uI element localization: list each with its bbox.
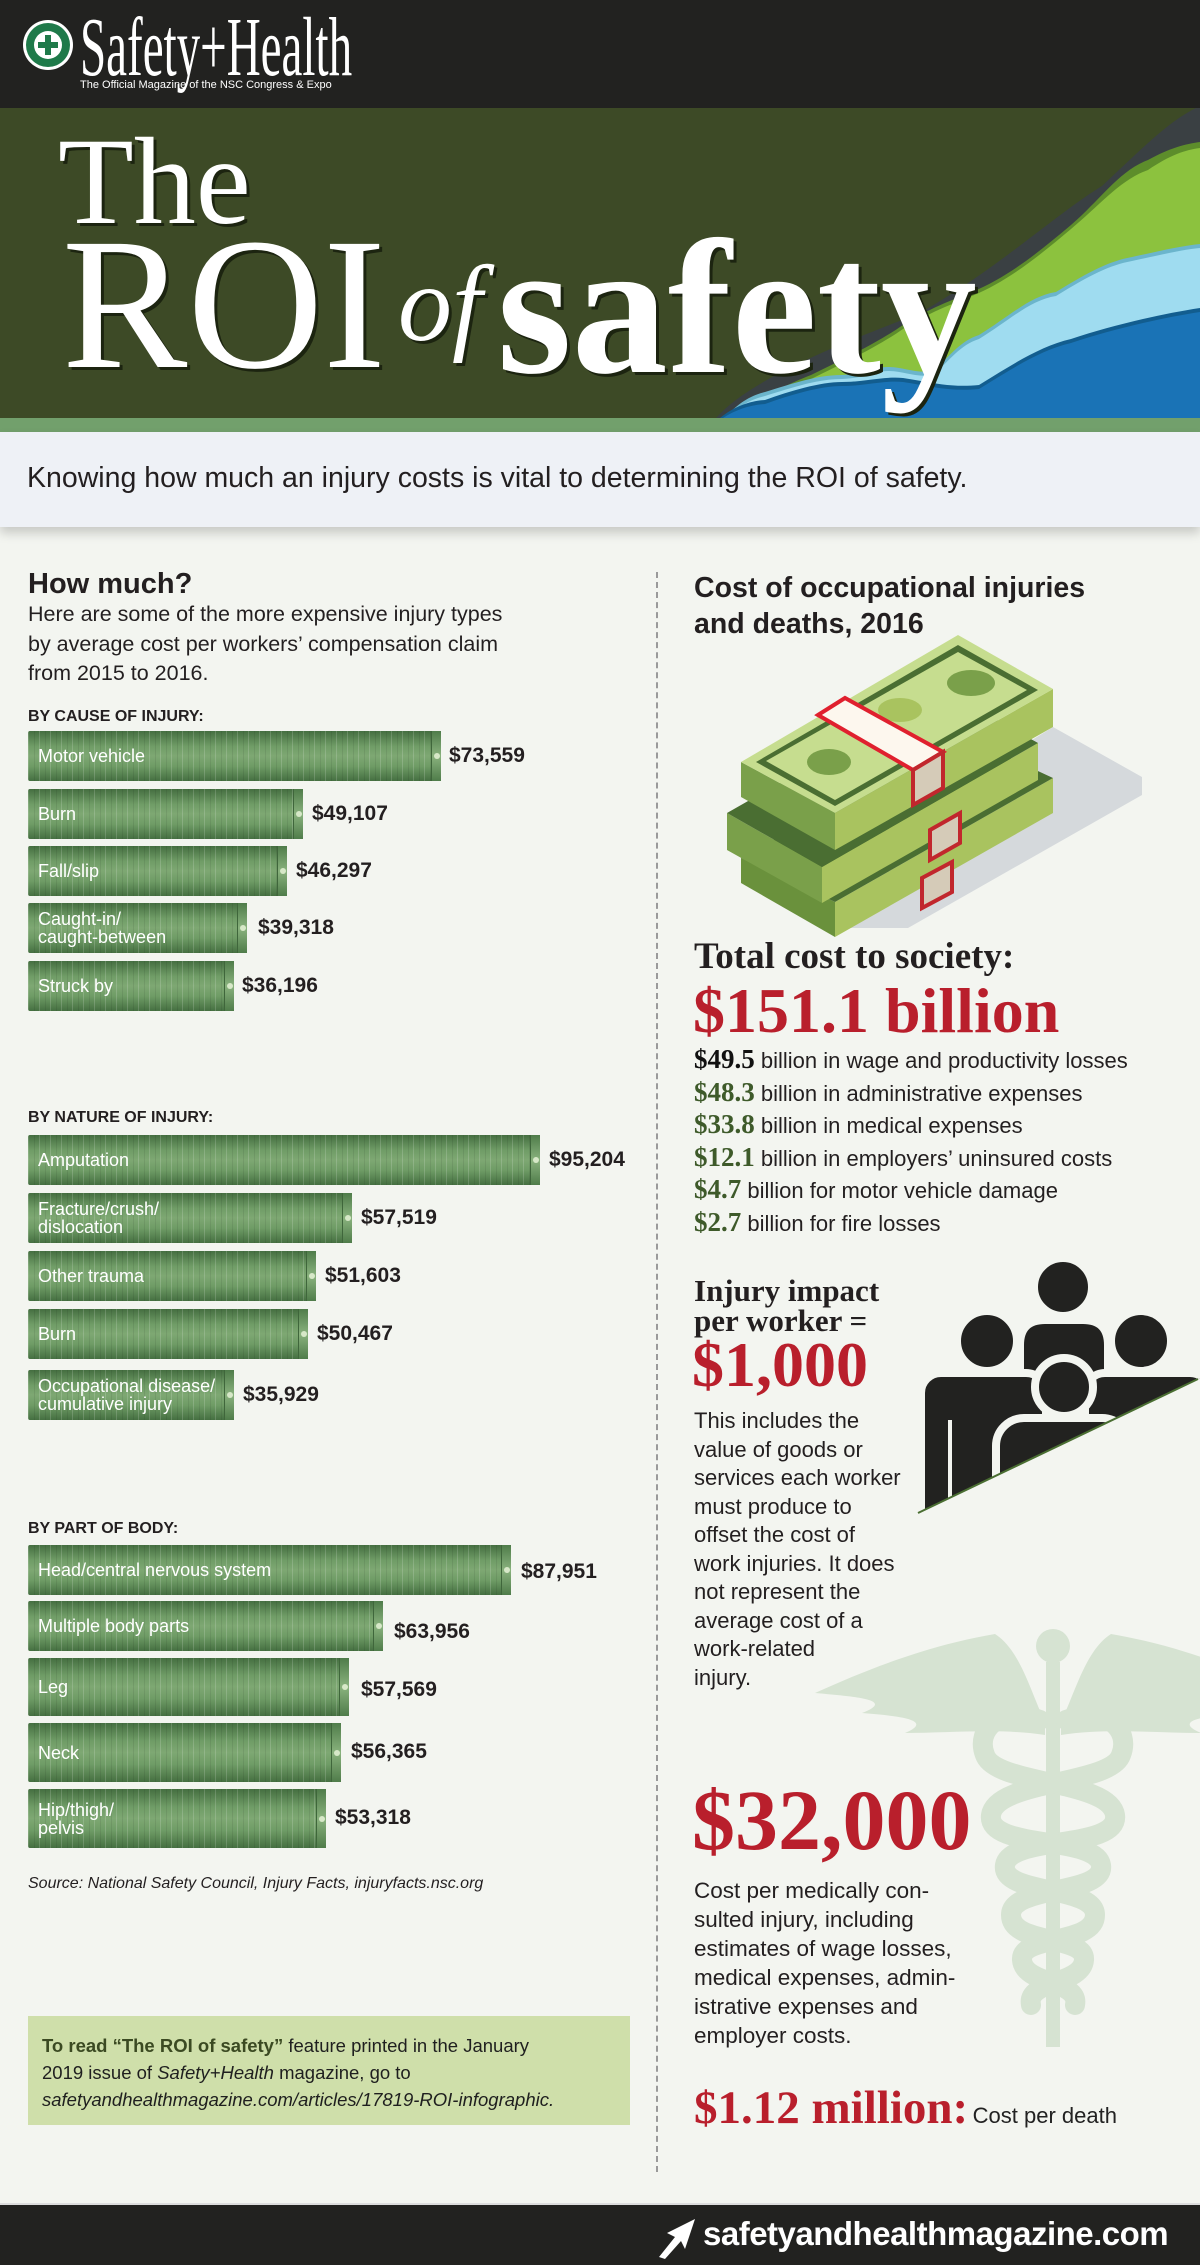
intro text: by average cost per workers’ compensation claim — [28, 632, 498, 656]
value: $39,318 — [258, 916, 334, 939]
text: cost per medically consulted injury: sulted injury, including — [694, 1907, 914, 1932]
intro text: from 2015 to 2016. — [28, 661, 208, 685]
bar: burn: Burn — [38, 804, 76, 824]
bar: fracture: Fracture/crush/ — [38, 1199, 159, 1219]
intro text — [28, 602, 502, 685]
stat: $1,000: $1,000 — [692, 1329, 868, 1400]
callout: read more box: To read “The ROI of safety” feature printed in the January — [42, 2035, 529, 2056]
text: per worker explanation: injury. — [694, 1664, 751, 1690]
text: cost per medically consulted injury — [694, 1878, 955, 2048]
logo tagline: The Official Magazine of the NSC Congress & Expo — [80, 79, 332, 91]
decorative waves — [716, 108, 1200, 418]
bar: burn — [28, 789, 303, 839]
text: per worker explanation: average cost of a — [694, 1608, 863, 1632]
bar: amputation: Amputation — [38, 1150, 129, 1170]
title: of: of — [398, 245, 482, 364]
heading: BY CAUSE OF INJURY: — [28, 708, 204, 725]
heading: injury impact per worker: Injury impact — [694, 1273, 879, 1308]
text: per worker explanation: offset the cost of — [694, 1522, 855, 1547]
subtitle band — [0, 432, 1200, 527]
bar: occupational disease — [28, 1370, 234, 1420]
bar: other trauma: Other trauma — [38, 1266, 144, 1286]
stat: $1.12 million cost per death: $1.12 million: Cost per death — [694, 2082, 1117, 2134]
bar: amputation — [28, 1135, 540, 1185]
bar: head — [28, 1545, 511, 1595]
text: cost per medically consulted injury: employer costs. — [694, 2023, 852, 2048]
text: per worker explanation: work injuries. It does — [694, 1550, 895, 1576]
icon: caduceus — [816, 1629, 1200, 2047]
list: cost breakdown — [694, 1044, 1128, 1236]
bar: fall/slip — [28, 846, 287, 896]
bar: hip: pelvis — [38, 1818, 84, 1838]
bar: burn — [28, 1309, 308, 1359]
text: cost per medically consulted injury: Cost per medically con- — [694, 1878, 929, 1903]
divider — [656, 572, 658, 2172]
subtitle text: Knowing how much an injury costs is vital to determining the ROI of safety. — [27, 462, 967, 494]
bar: neck — [28, 1723, 341, 1782]
chart: by part of body — [28, 1520, 597, 1848]
bar: motor vehicle — [28, 731, 441, 781]
icon: group of people — [918, 1262, 1200, 1514]
value: $51,603 — [325, 1264, 401, 1287]
logo: Safety+Health wordmark: Safety+Health — [80, 1, 352, 94]
bar: leg: Leg — [38, 1677, 68, 1697]
text: per worker explanation: This includes the — [694, 1408, 859, 1433]
value: $57,569 — [361, 1678, 437, 1701]
bar: caught-in — [28, 903, 247, 953]
text: per worker explanation: must produce to — [694, 1494, 852, 1518]
bar: caught-in: caught-between — [38, 927, 166, 947]
bar: occupational disease: Occupational disease/ — [38, 1376, 215, 1396]
text: per worker explanation — [694, 1408, 901, 1690]
title: ROI: ROI — [62, 199, 386, 408]
heading: cost of occupational injuries: Cost of occupational injuries — [694, 572, 1085, 604]
bar: leg — [28, 1658, 349, 1716]
value: $73,559 — [449, 744, 525, 767]
bar: caught-in: Caught-in/ — [38, 909, 121, 929]
value: $63,956 — [394, 1620, 470, 1643]
heading: BY NATURE OF INJURY: — [28, 1109, 213, 1126]
value: $35,929 — [243, 1383, 319, 1406]
stat: $151.1 billion: $151.1 billion — [693, 975, 1059, 1046]
icon: cursor arrow — [659, 2219, 695, 2259]
title: safety: safety — [497, 201, 977, 414]
text: cost per medically consulted injury: istrative expenses and — [694, 1994, 918, 2019]
top block — [741, 762, 835, 850]
text: per worker explanation: not represent the — [694, 1579, 860, 1604]
list: cost breakdown: $33.8 billion in medical expenses — [694, 1109, 1023, 1139]
callout: read more box: safetyandhealthmagazine.com/articles/17819-ROI-infographic. — [42, 2089, 554, 2110]
list: cost breakdown: $48.3 billion in administrative expenses — [694, 1076, 1082, 1106]
stat: $32,000: $32,000 — [692, 1772, 972, 1868]
bar: multiple body parts — [28, 1601, 383, 1651]
title banner — [0, 108, 1200, 418]
value: $56,365 — [351, 1740, 427, 1763]
logo: NSC seal — [23, 20, 73, 70]
footer — [0, 2203, 1200, 2265]
chart: by cause of injury — [28, 708, 525, 1011]
heading: total cost to society: Total cost to society: — [694, 936, 1014, 977]
value: $95,204 — [549, 1148, 625, 1171]
value: $53,318 — [335, 1806, 411, 1829]
list: cost breakdown: $2.7 billion for fire losses — [694, 1206, 941, 1236]
value: $49,107 — [312, 802, 388, 825]
value: $36,196 — [242, 974, 318, 997]
text: cost per medically consulted injury: estimates of wage losses, — [694, 1936, 952, 1961]
footer url: safetyandhealthmagazine.com — [703, 2215, 1168, 2252]
bar: multiple body parts: Multiple body parts — [38, 1616, 189, 1636]
heading: BY PART OF BODY: — [28, 1520, 178, 1537]
bar: struck by: Struck by — [38, 976, 113, 996]
heading: cost of occupational injuries: and deaths, 2016 — [694, 608, 924, 640]
bottom block — [741, 858, 835, 937]
source note: Source: National Safety Council, Injury Facts, injuryfacts.nsc.org — [28, 1875, 483, 1892]
bar: motor vehicle: Motor vehicle — [38, 746, 145, 766]
value: $57,519 — [361, 1206, 437, 1229]
heading: cost of occupational injuries — [694, 572, 1085, 640]
heading: injury impact per worker — [694, 1273, 880, 1338]
header bar — [0, 0, 1200, 108]
bar: hip: Hip/thigh/ — [38, 1800, 114, 1820]
text: per worker explanation: services each worker — [694, 1465, 901, 1490]
bar: burn: Burn — [38, 1324, 76, 1344]
value: $46,297 — [296, 859, 372, 882]
bar: fracture: dislocation — [38, 1217, 123, 1237]
bar: occupational disease: cumulative injury — [38, 1394, 172, 1414]
middle block — [727, 813, 822, 903]
value: $50,467 — [317, 1322, 393, 1345]
chart: by nature of injury — [28, 1109, 625, 1420]
text: per worker explanation: work-related — [694, 1636, 815, 1661]
bar: fracture — [28, 1193, 352, 1243]
bands — [818, 698, 943, 770]
heading: injury impact per worker: per worker = — [694, 1303, 867, 1338]
icon: money stack — [727, 635, 1142, 937]
heading: How much?: How much? — [28, 568, 192, 600]
list: cost breakdown: $4.7 billion for motor vehicle damage — [694, 1174, 1058, 1204]
list: cost breakdown: $49.5 billion in wage and productivity losses — [694, 1044, 1128, 1074]
bar: fall/slip: Fall/slip — [38, 861, 99, 881]
callout: read more box: 2019 issue of Safety+Health magazine, go to — [42, 2062, 411, 2083]
bar: other trauma — [28, 1251, 316, 1301]
panel: how much intro — [28, 568, 502, 685]
bar: struck by — [28, 961, 234, 1011]
bar: neck: Neck — [38, 1742, 79, 1762]
value: $87,951 — [521, 1560, 597, 1583]
bar: hip — [28, 1789, 326, 1848]
intro text: Here are some of the more expensive injury types — [28, 602, 502, 626]
bar: head: Head/central nervous system — [38, 1560, 271, 1580]
list: cost breakdown: $12.1 billion in employers’ uninsured costs — [694, 1142, 1112, 1172]
text: per worker explanation: value of goods or — [694, 1436, 863, 1462]
title: The: The — [58, 113, 251, 250]
callout: read more box — [28, 2016, 630, 2125]
text: cost per medically consulted injury: medical expenses, admin- — [694, 1965, 955, 1990]
